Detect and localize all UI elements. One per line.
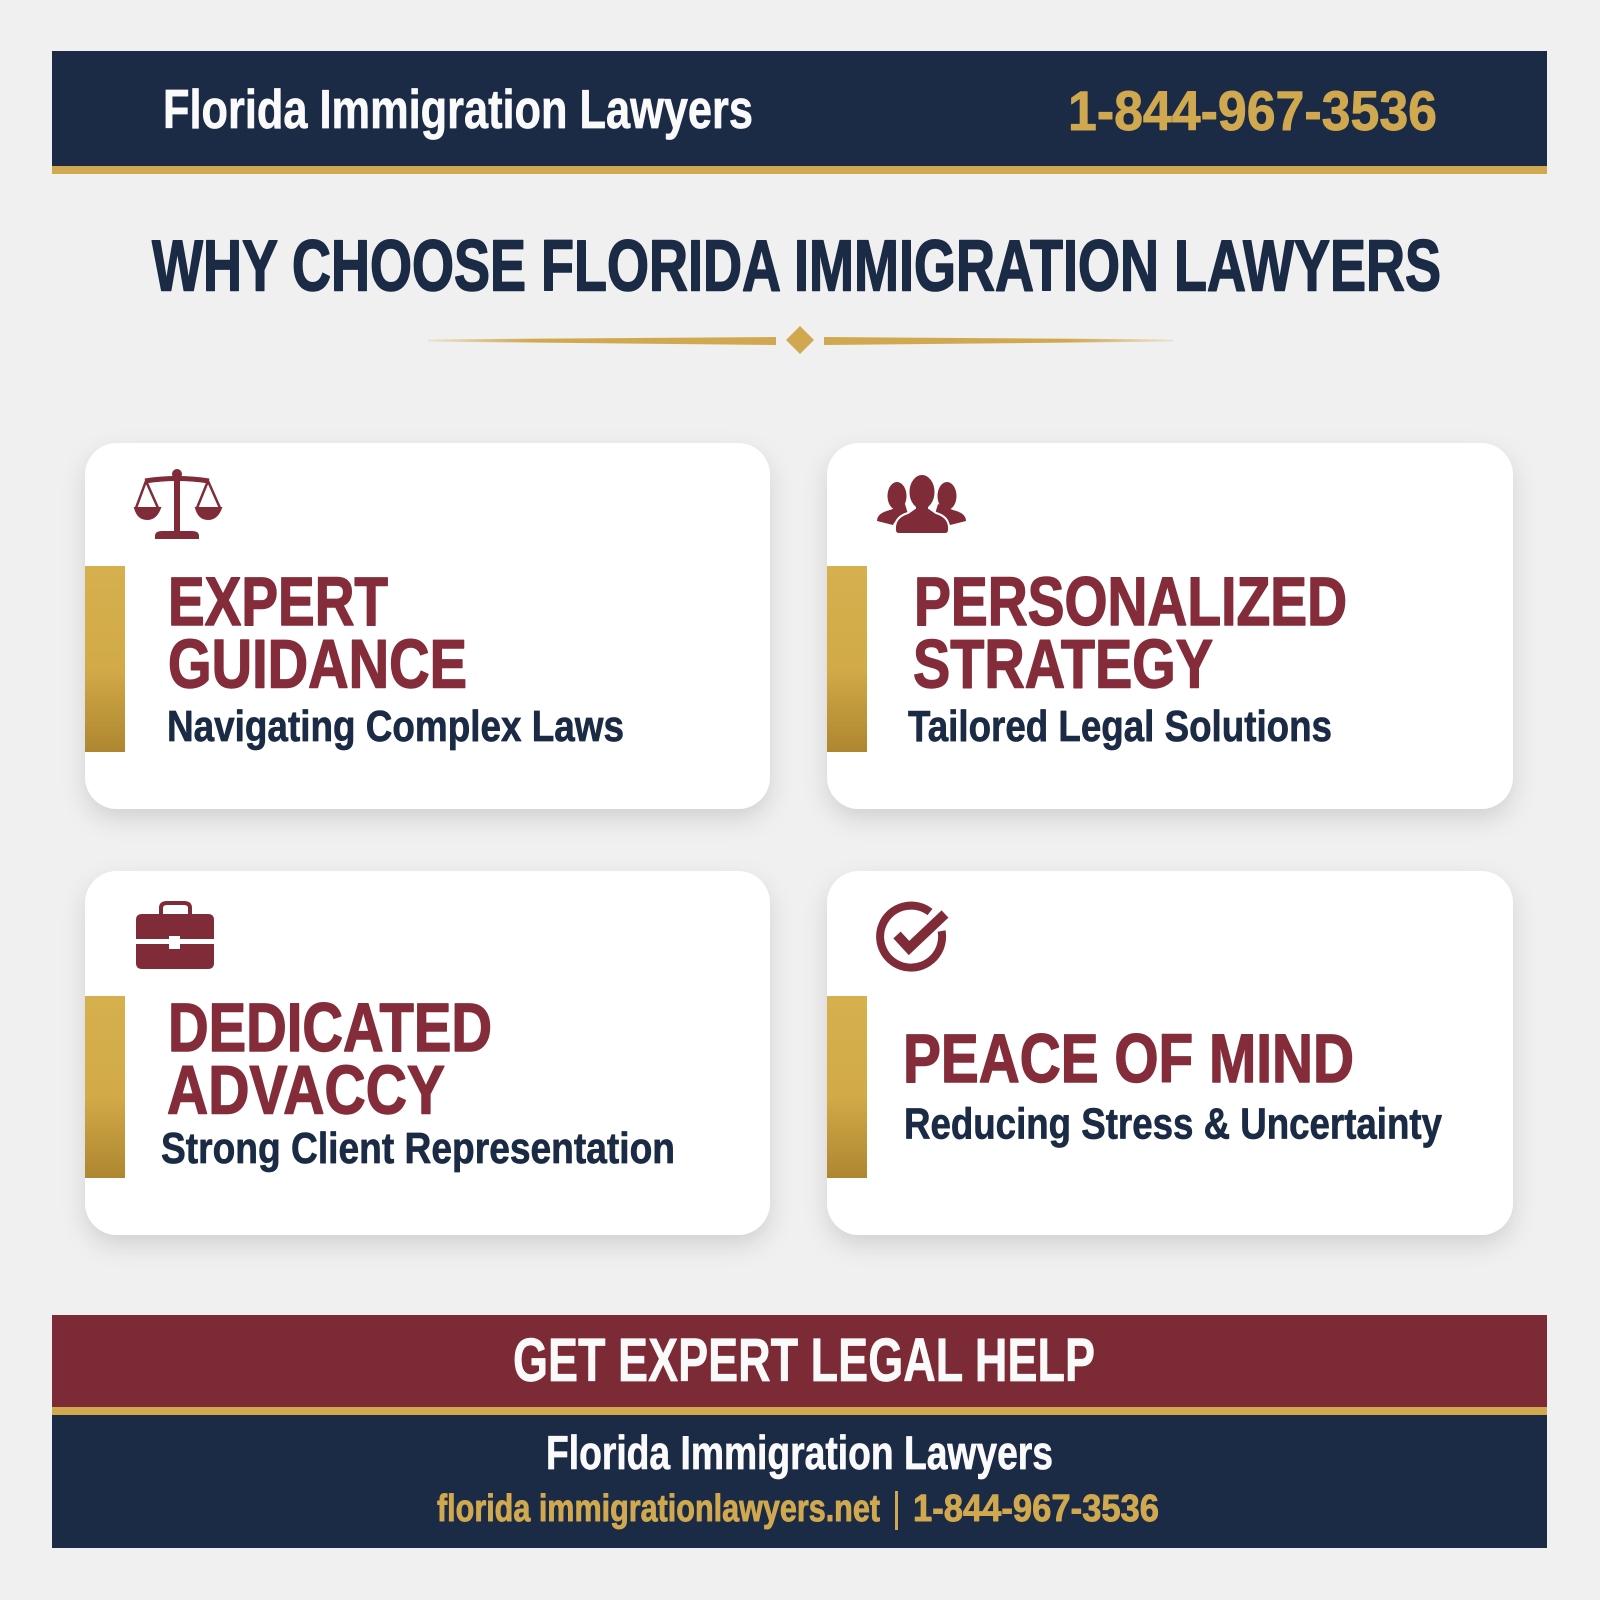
phone number: 1-844-967-3536 [913,1488,1159,1530]
subheading: Tailored Legal Solutions [908,702,1332,751]
footer contact banner [52,1407,1547,1548]
website: florida immigrationlawyers.net [437,1488,880,1530]
header banner [52,51,1547,174]
panel: dedicated advocacy [85,871,770,1235]
icon: check mark in circle [880,906,945,968]
accent bar [827,566,867,752]
heading: ADVACCY [167,1052,445,1128]
heading: EXPERT [168,563,388,640]
icon: briefcase [136,903,214,969]
accent bar [85,566,125,752]
subheading: Navigating Complex Laws [167,702,624,751]
call to action text: GET EXPERT LEGAL HELP [513,1326,1095,1394]
heading: STRATEGY [913,626,1213,702]
panel: personalized strategy [827,443,1513,809]
title divider with diamond [428,326,1173,354]
firm name: Florida Immigration Lawyers [163,78,753,140]
heading [168,563,467,702]
heading: PERSONALIZED [914,563,1347,640]
accent bar [827,996,867,1178]
firm name: Florida Immigration Lawyers [546,1426,1053,1479]
subheading: Reducing Stress & Uncertainty [904,1100,1442,1148]
accent bar [85,996,125,1178]
call to action banner [52,1315,1547,1408]
heading [167,989,492,1128]
heading: GUIDANCE [168,626,467,702]
heading: PEACE OF MIND [903,1020,1354,1097]
subheading: Strong Client Representation [161,1124,675,1173]
separator [895,1491,898,1530]
icon: scales of justice [135,469,221,539]
heading [913,563,1347,702]
phone number: 1-844-967-3536 [1068,79,1437,142]
heading: DEDICATED [168,989,492,1066]
panel: expert guidance [85,443,770,809]
icon: group of people [877,474,966,534]
panel: peace of mind [827,871,1513,1235]
